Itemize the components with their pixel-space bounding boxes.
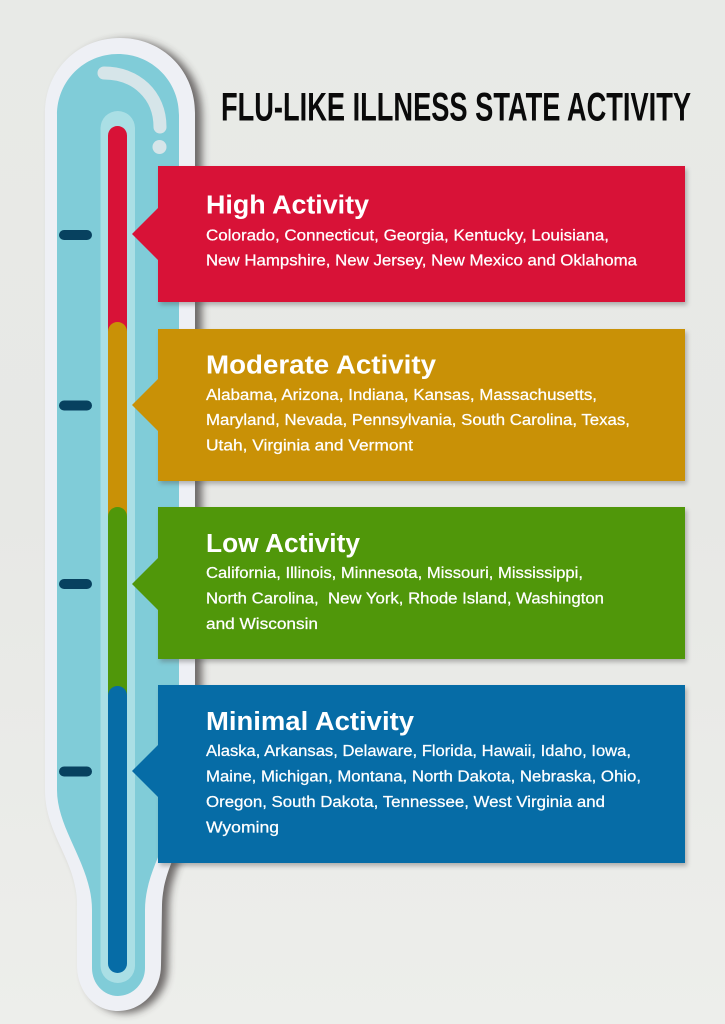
panel: low activity [132, 507, 687, 662]
panel: moderate activity [132, 329, 687, 484]
heading: low activity: Low Activity [206, 530, 361, 558]
text: moderate activity states: Alabama, Arizona, Indiana, Kansas, Massachusetts, [206, 387, 597, 404]
text: low activity states: North Carolina, New York, Rhode Island, Washington [206, 590, 604, 608]
heading: high activity: High Activity [206, 192, 370, 220]
text: moderate activity states: Utah, Virginia and Vermont [206, 438, 414, 454]
text: minimal activity states: Wyoming [206, 820, 279, 836]
text: high activity states: New Hampshire, New Jersey, New Mexico and Oklahoma [206, 252, 637, 270]
text: high activity states: Colorado, Connecticut, Georgia, Kentucky, Louisiana, [206, 228, 609, 244]
panel: high activity [132, 166, 687, 305]
text: low activity states: and Wisconsin [206, 616, 318, 633]
text: low activity states [206, 565, 604, 633]
text: minimal activity states: Oregon, South Dakota, Tennessee, West Virginia and [206, 794, 605, 811]
text: minimal activity states [206, 743, 641, 836]
heading: moderate activity: Moderate Activity [206, 352, 437, 380]
panel: minimal activity [132, 685, 687, 866]
text: low activity states: California, Illinois, Minnesota, Missouri, Mississippi, [206, 565, 583, 582]
text: minimal activity states: Maine, Michigan, Montana, North Dakota, Nebraska, Ohio, [206, 768, 641, 786]
text: moderate activity states [206, 387, 630, 454]
text: moderate activity states: Maryland, Nevada, Pennsylvania, South Carolina, Texas, [206, 412, 630, 429]
text: high activity states [206, 228, 637, 270]
text: minimal activity states: Alaska, Arkansas, Delaware, Florida, Hawaii, Idaho, Iowa, [206, 743, 631, 760]
icon: thermometer [45, 38, 202, 1013]
heading: minimal activity: Minimal Activity [206, 708, 415, 736]
